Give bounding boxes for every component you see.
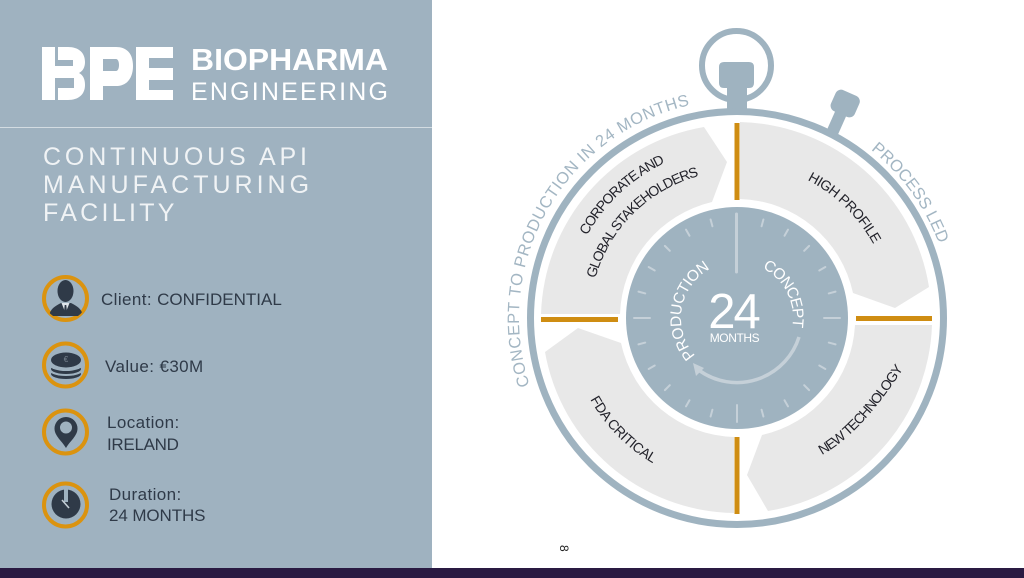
title: MANUFACTURING [43, 171, 313, 199]
icon: value coins: € [64, 355, 69, 364]
curved label: process led: PROCESS LED [872, 142, 948, 242]
title [43, 143, 313, 227]
value text: Value: €30M [105, 357, 204, 376]
logo mark: BPE [42, 47, 173, 100]
segment: high profile [740, 122, 929, 308]
dial label: production: PRODUCTION [670, 260, 709, 361]
logo wordmark: ENGINEERING [191, 78, 388, 106]
company logo [42, 42, 388, 106]
segment: new technology: NEW TECHNOLOGY [818, 364, 902, 454]
location text: Location: [107, 413, 180, 432]
duration text: Duration: [109, 485, 182, 504]
icon: value coins [44, 344, 87, 386]
stopwatch crown button [719, 62, 754, 112]
segment: corporate and global stakeholders: CORPORATE AND [580, 156, 663, 234]
icon: duration timer [44, 484, 87, 526]
segment: corporate and global stakeholders [541, 127, 727, 314]
segment: FDA critical [545, 328, 734, 513]
dial hand [735, 214, 738, 272]
duration text [109, 485, 205, 525]
stopwatch crown loop [702, 31, 771, 100]
stopwatch infographic [508, 28, 948, 528]
footer bar [0, 568, 1024, 578]
dial arrow [693, 337, 799, 383]
dial value: 24 months: MONTHS [710, 331, 760, 345]
logo wordmark [191, 42, 388, 106]
segment: new technology [747, 325, 932, 511]
icon: client person [44, 277, 87, 320]
location text [107, 413, 180, 454]
title: CONTINUOUS API [43, 143, 311, 171]
title: FACILITY [43, 199, 178, 227]
dial [626, 207, 848, 429]
segment: corporate and global stakeholders: GLOBAL STAKEHOLDERS [587, 168, 698, 277]
left panel background [0, 0, 432, 568]
curved label: concept to production: CONCEPT TO PRODUCTION IN 24 MONTHS [508, 95, 688, 387]
dial value: 24 months: 24 [708, 285, 759, 339]
stopwatch outer ring [530, 112, 944, 524]
icon: location pin [44, 410, 87, 454]
duration text: 24 MONTHS [109, 506, 205, 525]
segment: high profile: HIGH PROFILE [808, 172, 882, 244]
client text: Client: CONFIDENTIAL [101, 290, 282, 309]
logo wordmark: BIOPHARMA [191, 42, 388, 77]
dial label: concept: CONCEPT [765, 261, 804, 328]
location text: IRELAND [107, 435, 179, 454]
stopwatch side button [819, 88, 862, 141]
page number: 8 [557, 545, 571, 552]
segment: FDA critical: FDA CRITICAL [590, 396, 654, 464]
